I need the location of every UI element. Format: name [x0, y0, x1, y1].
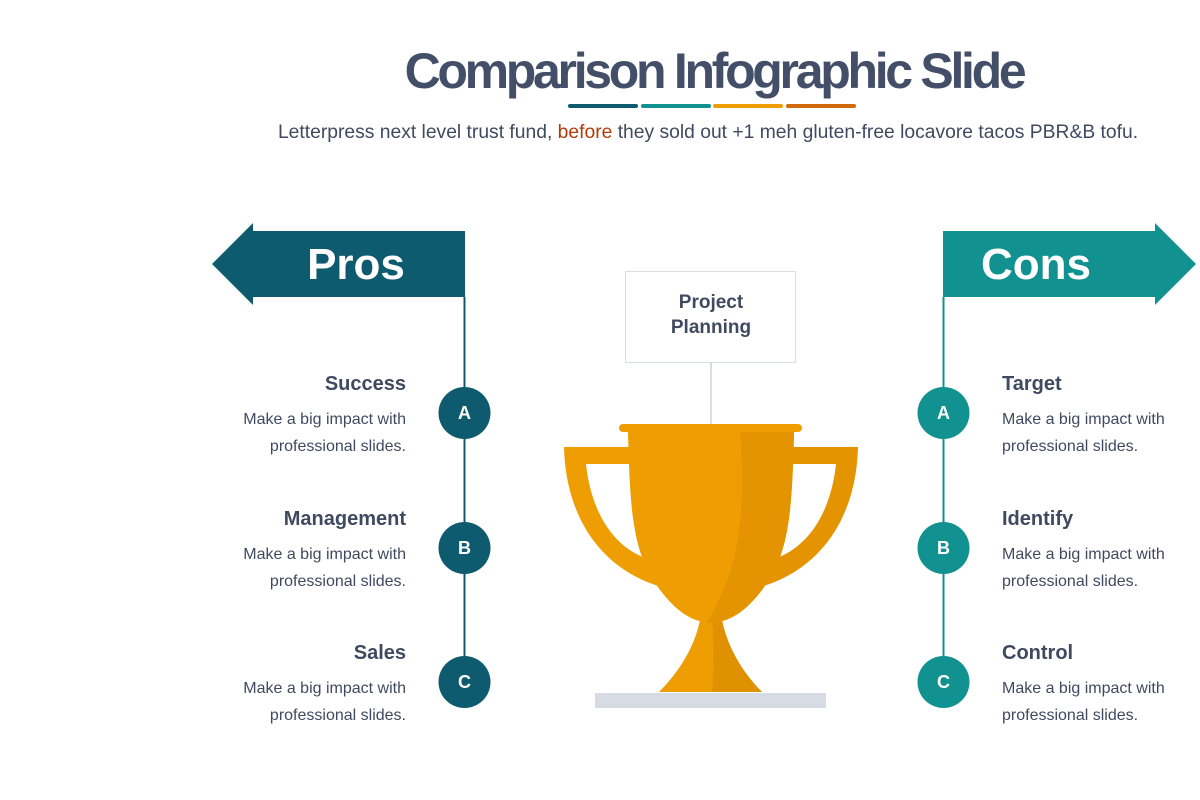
cons markers: C	[937, 672, 950, 692]
pros timeline line	[464, 297, 466, 700]
label box: project planning: Planning	[671, 317, 751, 338]
pros item B: professional slides.	[270, 573, 406, 590]
pros item A: Make a big impact with	[243, 411, 406, 428]
title underline bars	[568, 104, 856, 108]
pros arrow banner: Pros	[307, 240, 405, 289]
pros markers: B	[458, 538, 471, 558]
cons item C: Control	[1002, 642, 1073, 664]
pros item C	[243, 642, 406, 724]
pros markers	[438, 387, 490, 708]
cons item A: Make a big impact with	[1002, 411, 1165, 428]
cons arrow banner: Cons	[981, 240, 1091, 289]
cons item B: Identify	[1002, 508, 1073, 530]
pros markers: C	[458, 672, 471, 692]
cons item B: Make a big impact with	[1002, 546, 1165, 563]
label box: project planning	[626, 272, 796, 424]
pros item B	[243, 508, 406, 590]
cons item C: professional slides.	[1002, 707, 1138, 724]
cons item A: professional slides.	[1002, 438, 1138, 455]
cons markers: A	[937, 403, 950, 423]
cons item A: Target	[1002, 373, 1062, 395]
cons item B: professional slides.	[1002, 573, 1138, 590]
cons item C: Make a big impact with	[1002, 680, 1165, 697]
title: Comparison Infographic Slide	[405, 43, 1023, 99]
cons item B	[1002, 508, 1165, 590]
cons item C	[1002, 642, 1165, 724]
pros item C: professional slides.	[270, 707, 406, 724]
label box: project planning: Project	[679, 292, 744, 313]
cons timeline line	[942, 297, 944, 700]
cons item A	[1002, 373, 1165, 455]
pros item A: Success	[325, 373, 406, 395]
pros arrow banner	[212, 223, 465, 305]
pros item B: Management	[284, 508, 406, 530]
pros item C: Make a big impact with	[243, 680, 406, 697]
cons arrow banner	[943, 223, 1196, 305]
pros markers: A	[458, 403, 471, 423]
pros item A: professional slides.	[270, 438, 406, 455]
subtitle: Letterpress next level trust fund, before they sold out +1 meh gluten-free locavore tacos PBR&B tofu.	[278, 122, 1138, 143]
pros item B: Make a big impact with	[243, 546, 406, 563]
cons markers	[918, 387, 970, 708]
pros item A	[243, 373, 406, 455]
cons markers: B	[937, 538, 950, 558]
icon: trophy	[564, 424, 858, 708]
pros item C: Sales	[354, 642, 406, 664]
